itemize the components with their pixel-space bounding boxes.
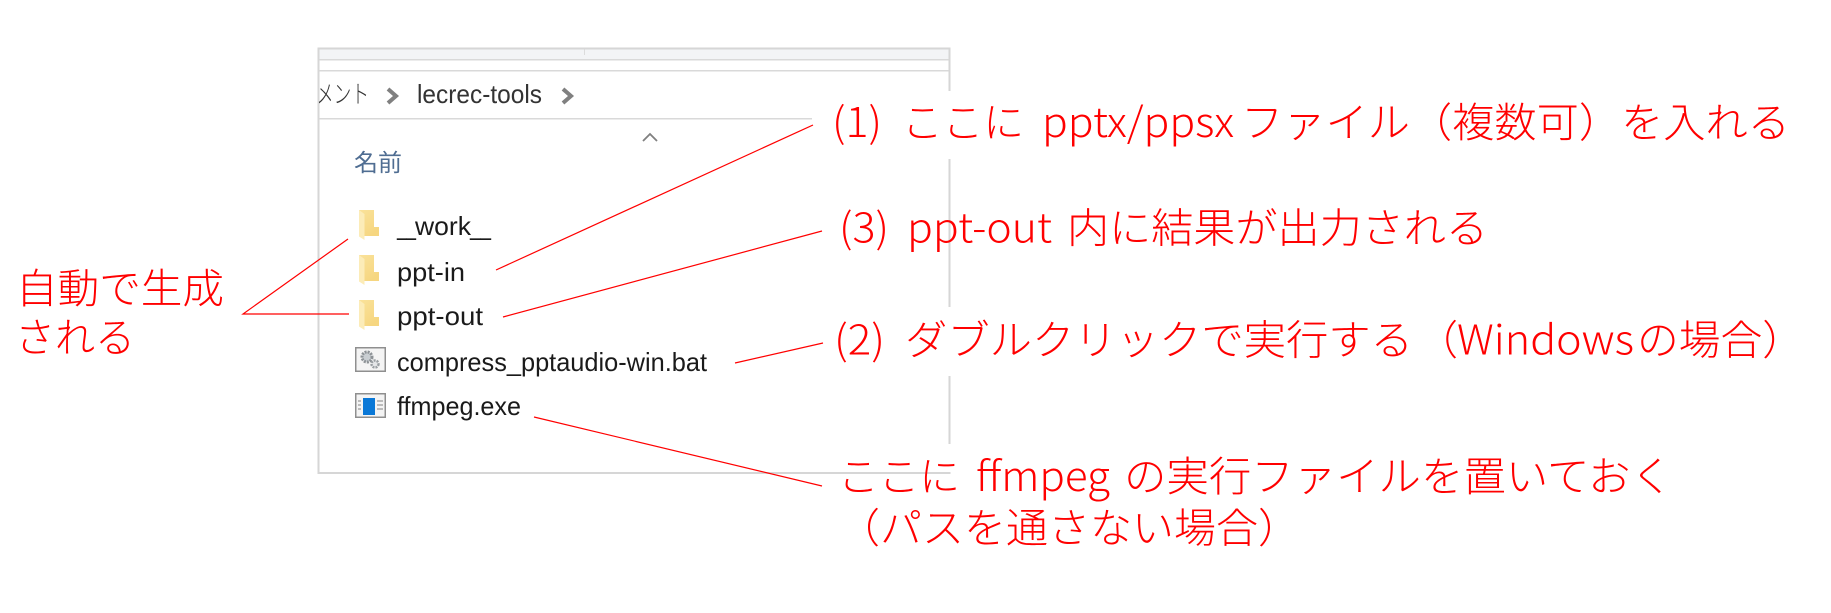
callout: step 2: の場合） [1637, 306, 1804, 366]
icon: batch file gears [356, 348, 385, 371]
file row: batch file: compress_pptaudio-win.bat [397, 347, 708, 377]
file row: work: __ [396, 211, 416, 241]
arrow: to ppt-in [496, 125, 813, 270]
file row: work: __ [469, 211, 491, 241]
window bottom border [318, 472, 950, 474]
arrow: auto-generated bracket [243, 239, 349, 314]
callout: step 1: ファイル（複数可）を入れる [1241, 89, 1790, 149]
callout: step 2: （ [1417, 306, 1458, 366]
callout: auto-generated line 1: 自動で生成 [16, 255, 224, 315]
callout: step 3 [839, 194, 1488, 254]
column header: name: 名前 [354, 150, 402, 177]
window right border lower [948, 376, 950, 444]
window left border [318, 48, 320, 474]
icon: folder ppt-in [359, 255, 379, 285]
file row: ffmpeg: ffmpeg.exe [397, 391, 521, 421]
arrow: to batch file [735, 343, 823, 363]
callout: step 2: Windows [1457, 306, 1634, 366]
window right border middle [948, 159, 950, 307]
callout: ffmpeg placement: ここに [838, 443, 960, 503]
callout: step 2 [834, 306, 1804, 366]
panel: file explorer window [316, 48, 950, 474]
callout: auto-generated line 2: される [15, 304, 135, 364]
arrow: to ffmpeg [534, 417, 822, 486]
callout: ffmpeg placement: ffmpeg [976, 443, 1110, 503]
icon: sort caret [643, 134, 657, 141]
icon: folder work [359, 210, 379, 240]
callout: step 1 [832, 89, 1790, 149]
icon: ffmpeg executable [356, 394, 385, 417]
file row: ppt-in: ppt-in [397, 257, 465, 287]
icon: folder ppt-out [359, 300, 379, 330]
callout: step 2: (2) [834, 306, 885, 366]
arrow: to ppt-out [503, 231, 822, 317]
file row: ppt-out: ppt-out [397, 301, 484, 331]
callout: step 1: (1) [832, 89, 882, 149]
breadcrumb: parent folder: メント [316, 75, 369, 111]
icon: breadcrumb chevron 1 [388, 89, 396, 103]
icon: breadcrumb chevron 2 [563, 89, 571, 103]
window right border upper [948, 48, 950, 91]
window top border [318, 48, 950, 50]
callout: step 3: ppt-out [907, 194, 1052, 254]
callout: ffmpeg placement [838, 443, 1673, 503]
file row: work: work [414, 211, 472, 241]
callout: step 1: pptx/ppsx [1042, 89, 1234, 149]
callout: step 3: 内に結果が出力される [1067, 194, 1488, 254]
file row: work [396, 211, 491, 241]
callout: step 2: ダブルクリックで実行する [905, 306, 1413, 366]
callout: step 3: (3) [839, 194, 889, 254]
callout: step 1: ここに [902, 89, 1024, 149]
breadcrumb: lecrec-tools: lecrec-tools [417, 79, 542, 109]
callout: ffmpeg placement: の実行ファイルを置いておく [1124, 443, 1673, 503]
callout: ffmpeg note: （パスを通さない場合） [838, 494, 1300, 554]
